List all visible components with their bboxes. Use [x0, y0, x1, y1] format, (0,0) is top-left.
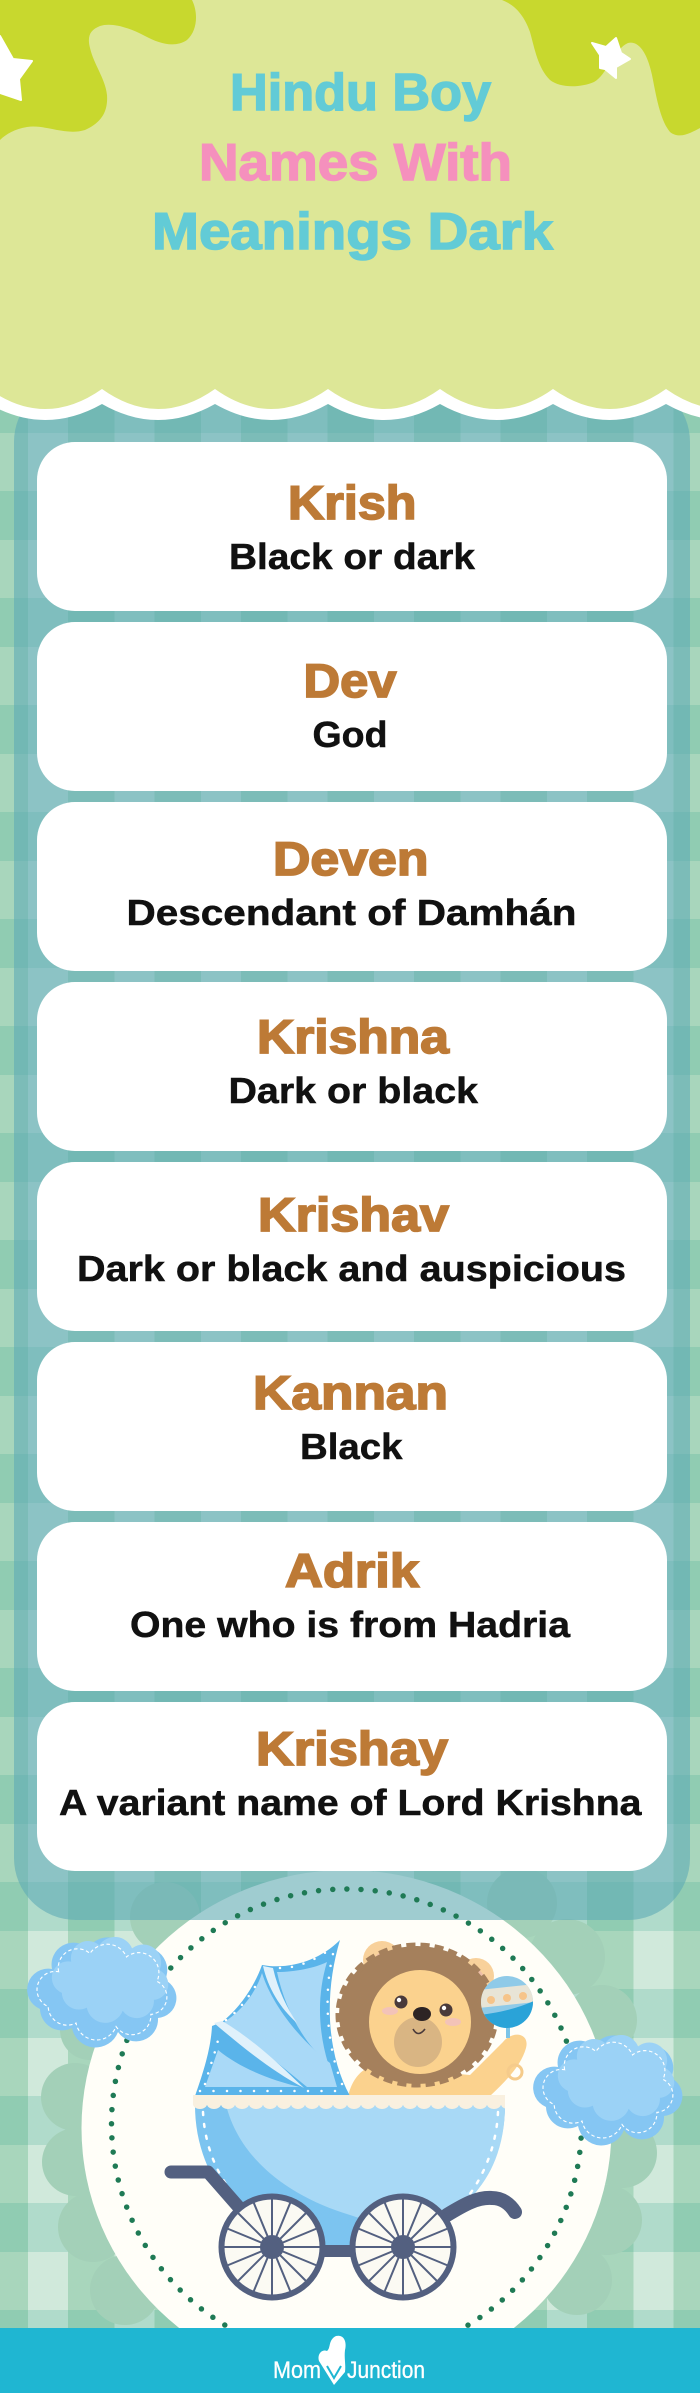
mouth	[413, 2029, 425, 2034]
handle	[171, 2172, 250, 2220]
ears	[363, 1941, 401, 1979]
face	[369, 1970, 471, 2074]
title: Names With	[199, 134, 512, 192]
card: Krishav	[37, 1162, 667, 1331]
card: Deven	[37, 802, 667, 971]
white medallion circle	[82, 1871, 611, 2328]
star left	[0, 36, 32, 100]
header blob right	[502, 0, 700, 135]
card: Krishay	[37, 1702, 667, 1871]
card: Krishay: A variant name of Lord Krishna	[59, 1782, 643, 1823]
card: Dev: God	[312, 714, 388, 755]
title: Meanings Dark	[152, 203, 553, 261]
footer bar	[0, 2328, 700, 2393]
right wheel	[352, 2196, 454, 2298]
header panel	[0, 0, 700, 420]
scalloped green shape behind the medallion	[41, 1876, 657, 2325]
card: Adrik: Adrik	[285, 1544, 420, 1597]
stroller	[171, 1940, 515, 2298]
lion with rattle	[339, 1941, 536, 2096]
card: Kannan	[37, 1342, 667, 1511]
dotted circle	[112, 1889, 582, 2359]
logo: MomJunction: Junction	[347, 2357, 425, 2384]
axle	[322, 2245, 352, 2257]
card: Krishna: Krishna	[257, 1010, 450, 1063]
muzzle	[394, 2017, 442, 2067]
card: Krish	[37, 442, 667, 611]
card: Krishay: Krishay	[256, 1722, 448, 1775]
cloud left	[27, 1937, 176, 2047]
rattle	[481, 1976, 533, 2038]
left wheel	[222, 2196, 322, 2298]
card: Krish: Black or dark	[229, 536, 476, 577]
front fender	[447, 2198, 515, 2215]
card: Krishav: Krishav	[258, 1188, 449, 1241]
card: Deven: Descendant of Damhán	[126, 892, 576, 933]
basket	[193, 2095, 505, 2250]
title	[152, 64, 553, 261]
cloud right	[533, 2035, 682, 2145]
card: Krishna: Dark or black	[228, 1070, 479, 1111]
card: Kannan: Black	[300, 1426, 404, 1467]
nose	[413, 2007, 431, 2021]
header blob left	[0, 0, 196, 140]
logo: MomJunction	[273, 2336, 425, 2385]
lion body and arm	[348, 2035, 527, 2096]
card: Adrik: One who is from Hadria	[130, 1604, 571, 1645]
logo: MomJunction: Mom	[273, 2357, 321, 2384]
ring on hand	[508, 2065, 522, 2079]
card: Kannan: Kannan	[253, 1366, 448, 1419]
card: Deven: Deven	[273, 832, 428, 885]
eyes	[394, 1996, 408, 2008]
card: Krishna	[37, 982, 667, 1151]
teal panel	[14, 380, 690, 1920]
card: Krish: Krish	[288, 476, 416, 529]
card: Adrik	[37, 1522, 667, 1691]
mane	[339, 1946, 495, 2084]
card: Dev: Dev	[304, 654, 396, 707]
hood	[195, 1940, 350, 2096]
star right	[592, 38, 630, 78]
title: Hindu Boy	[230, 64, 491, 122]
card: Krishav: Dark or black and auspicious	[77, 1248, 626, 1289]
card: Dev	[37, 622, 667, 791]
cheeks	[382, 2007, 398, 2015]
